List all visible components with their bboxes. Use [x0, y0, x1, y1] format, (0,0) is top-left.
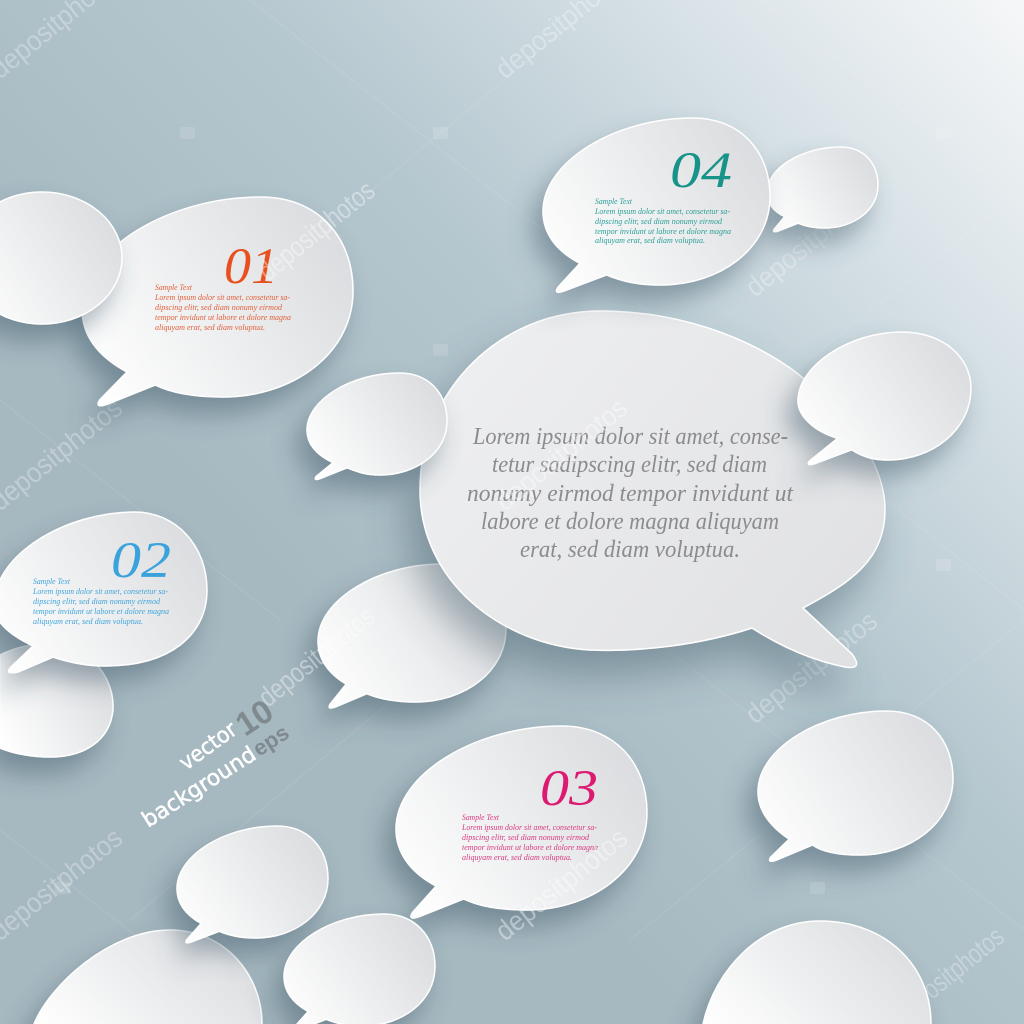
watermark text over bubbles: depositphotos [252, 174, 381, 287]
watermark text over bubbles: depositphotos [252, 600, 381, 713]
bubble: upper right of main [798, 332, 971, 465]
watermark lines and camera marks on background: depositphotos [739, 178, 883, 303]
text 03: aliquyam erat, sed diam voluptua. [462, 853, 572, 862]
bubble: top left [0, 192, 122, 324]
text 02: Sample Text [33, 577, 71, 586]
text 04: tempor invidunt ut labore et dolore magna [595, 227, 731, 236]
watermark text over bubbles: depositphotos [489, 392, 633, 517]
main bubble text: Lorem ipsum dolor sit amet, conse- [472, 424, 788, 450]
main bubble text: labore et dolore magna aliquyam [481, 509, 779, 535]
text 01: Sample Text [155, 283, 193, 292]
bubble 01 [82, 197, 353, 406]
text 01: tempor invidunt ut labore et dolore magna [155, 313, 291, 322]
text 01: dipscing elitr, sed diam nonumy eirmod [155, 303, 283, 312]
text 04: aliquyam erat, sed diam voluptua. [595, 236, 705, 245]
label: 10: 10 [229, 692, 280, 743]
watermark lines and camera marks on background: depositphotos [739, 605, 883, 730]
text 04: Lorem ipsum dolor sit amet, consetetur sa- [594, 207, 730, 216]
bubble: left of main [307, 373, 447, 479]
bubble: bottom far left [34, 930, 262, 1024]
text 03: tempor invidunt ut labore et dolore magna [462, 843, 598, 852]
main bubble shape [420, 311, 885, 667]
watermark text over bubbles: depositphotos [489, 822, 633, 947]
number 03: 03 [540, 761, 598, 817]
watermark text over bubbles [252, 174, 633, 947]
number 02: 02 [111, 533, 171, 589]
number 01: 01 [224, 239, 278, 295]
bubble: bottom left small [177, 826, 328, 943]
bubble: lower left of main [318, 564, 506, 708]
text 03: Sample Text [462, 813, 500, 822]
text 02: Lorem ipsum dolor sit amet, consetetur sa- [32, 587, 168, 596]
bubble 04 [543, 118, 770, 292]
text 02 [32, 577, 169, 626]
bubble 01 shape [82, 197, 353, 406]
number 04: 04 [670, 143, 732, 199]
bubble: bottom right [703, 921, 931, 1024]
text 02: dipscing elitr, sed diam nonumy eirmod [33, 597, 161, 606]
text 02: aliquyam erat, sed diam voluptua. [33, 617, 143, 626]
label: background: background [138, 742, 261, 833]
bubble 02 [0, 512, 207, 673]
text 01: Lorem ipsum dolor sit amet, consetetur sa- [154, 293, 290, 302]
bubble: right of 04 [767, 147, 878, 232]
main bubble text: tetur sadipscing elitr, sed diam [492, 452, 767, 478]
main bubble text: nonumy eirmod tempor invidunt ut [467, 481, 794, 507]
label: vector: vector [175, 717, 243, 776]
bubble: below 02 [0, 644, 113, 757]
text 04: dipscing elitr, sed diam nonumy eirmod [595, 217, 723, 226]
text 02: tempor invidunt ut labore et dolore magna [33, 607, 169, 616]
text 04 [594, 197, 731, 245]
text 01 [154, 283, 291, 332]
vector 10 eps badge [138, 692, 294, 833]
text 03: Lorem ipsum dolor sit amet, consetetur sa- [461, 823, 597, 832]
bubble 04 shape [543, 118, 770, 292]
text 04: Sample Text [595, 197, 633, 206]
main bubble [420, 311, 885, 667]
bubble: bottom middle [284, 914, 435, 1024]
label: eps: eps [248, 720, 294, 761]
text 03 [461, 813, 598, 862]
text 01: aliquyam erat, sed diam voluptua. [155, 323, 265, 332]
main bubble text: erat, sed diam voluptua. [520, 537, 740, 563]
text 03: dipscing elitr, sed diam nonumy eirmod [462, 833, 590, 842]
bubble 03 shape [396, 726, 647, 918]
bubble 02 shape [0, 512, 207, 673]
main bubble text [467, 424, 794, 563]
bubble 03 [396, 726, 647, 918]
bubble: lower right [758, 711, 953, 861]
